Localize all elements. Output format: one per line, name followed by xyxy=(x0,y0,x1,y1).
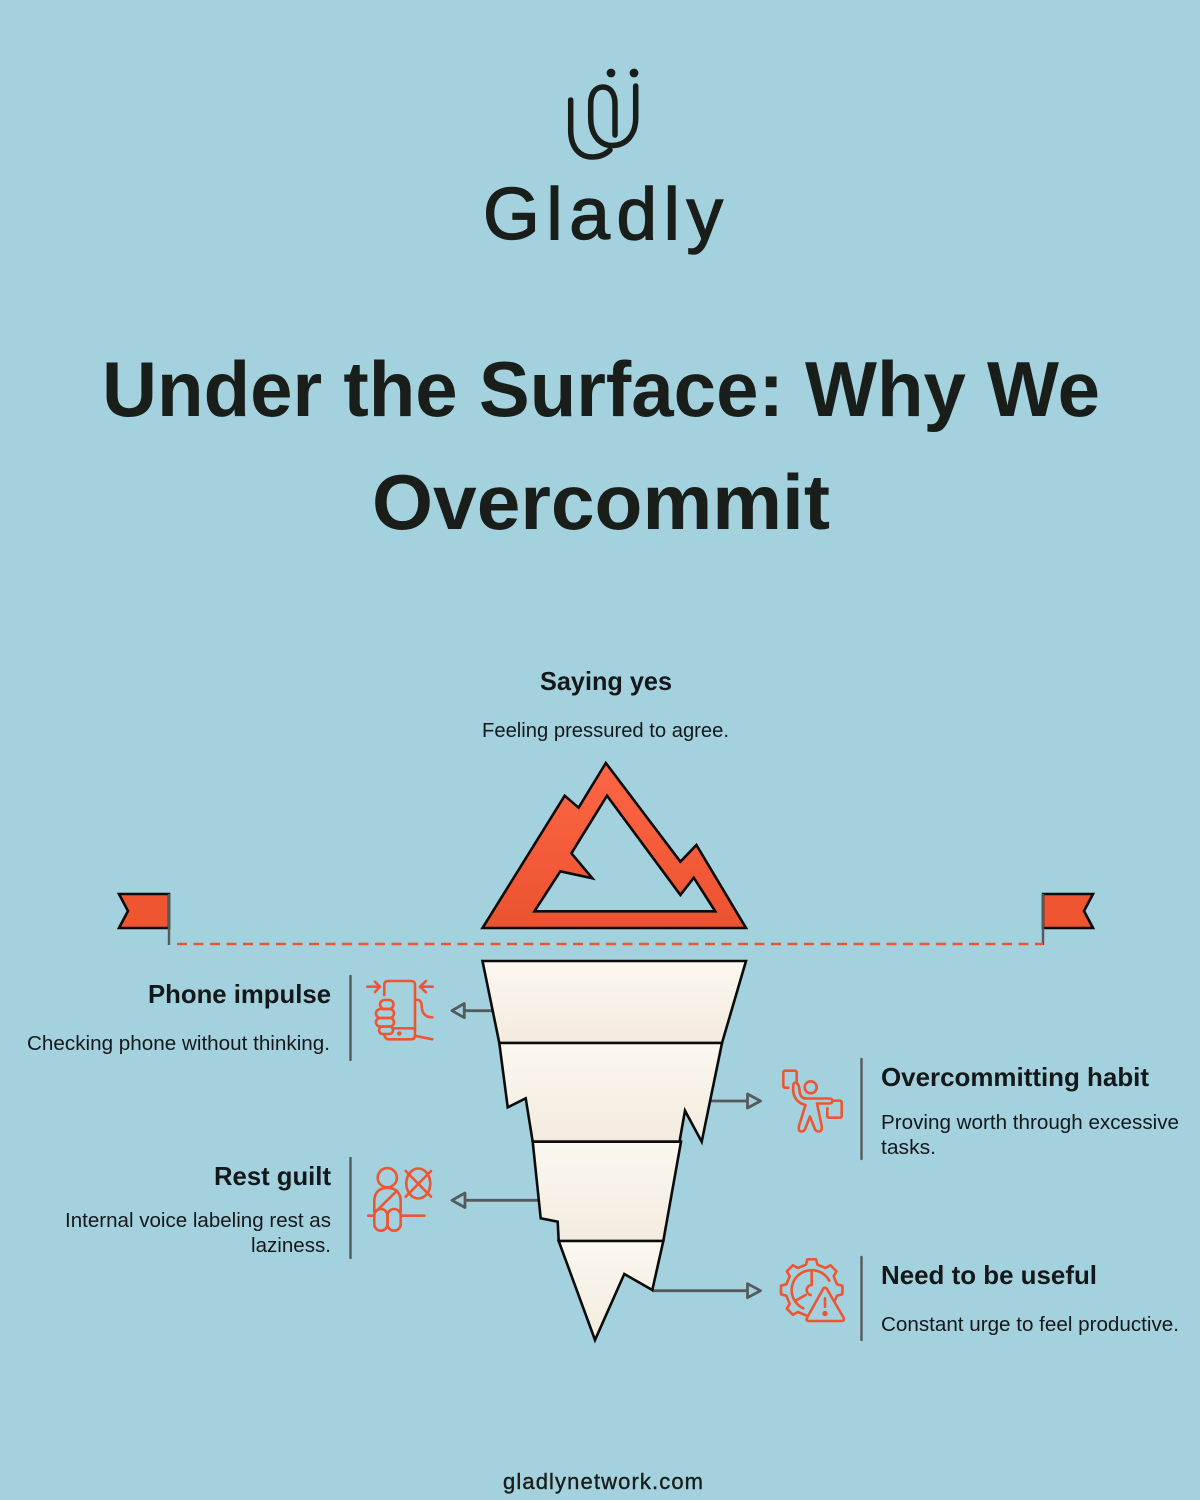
flag left xyxy=(119,894,169,945)
icon: phone in hand xyxy=(367,981,433,1039)
title: Under the Surface: Why We xyxy=(102,345,1100,433)
text block: need to be useful xyxy=(881,1260,1179,1336)
text block: overcommitting habit: tasks. xyxy=(881,1136,936,1159)
text block: need to be useful: Constant urge to feel productive. xyxy=(881,1313,1179,1336)
text block: overcommitting habit: Overcommitting habit xyxy=(881,1062,1149,1092)
iceberg layer 2 xyxy=(499,1043,722,1142)
waterline xyxy=(177,943,1043,945)
divider: rest guilt xyxy=(349,1158,352,1258)
text block: saying yes xyxy=(482,666,729,742)
flag right xyxy=(1043,894,1093,945)
icon: person juggling tasks xyxy=(783,1071,842,1132)
divider: overcommitting habit xyxy=(860,1059,863,1159)
title xyxy=(102,345,1100,546)
text block: rest guilt: Rest guilt xyxy=(214,1161,331,1191)
text block: phone impulse: Phone impulse xyxy=(148,979,331,1009)
iceberg layer 1 xyxy=(482,961,746,1043)
text block: rest guilt xyxy=(65,1161,331,1257)
text block: phone impulse: Checking phone without thinking. xyxy=(27,1032,330,1055)
text block: need to be useful: Need to be useful xyxy=(881,1260,1097,1290)
logo mark xyxy=(571,69,638,157)
text block: overcommitting habit xyxy=(881,1062,1179,1159)
title: Overcommit xyxy=(372,458,830,546)
text block: overcommitting habit: Proving worth through excessive xyxy=(881,1111,1179,1134)
arrow: need to be useful xyxy=(652,1284,760,1298)
divider: need to be useful xyxy=(860,1257,863,1340)
arrow: phone impulse xyxy=(452,1004,493,1018)
divider: phone impulse xyxy=(349,976,352,1060)
logo wordmark: Gladly xyxy=(483,174,724,255)
icon: person resting with cross xyxy=(368,1168,431,1231)
footer url: gladlynetwork.com xyxy=(503,1469,703,1494)
text block: rest guilt: Internal voice labeling rest as xyxy=(65,1209,331,1232)
iceberg layer 4 xyxy=(559,1241,663,1340)
text block: saying yes: Feeling pressured to agree. xyxy=(482,719,729,742)
iceberg layer 3 xyxy=(533,1142,681,1241)
arrow: overcommitting habit xyxy=(711,1094,760,1108)
text block: rest guilt: laziness. xyxy=(251,1234,331,1257)
iceberg tip above water xyxy=(482,763,746,928)
text block: saying yes: Saying yes xyxy=(540,666,672,696)
iceberg below water xyxy=(482,961,746,1340)
text block: phone impulse xyxy=(27,979,331,1055)
arrow: rest guilt xyxy=(452,1193,539,1208)
icon: gear with warning xyxy=(781,1259,844,1321)
